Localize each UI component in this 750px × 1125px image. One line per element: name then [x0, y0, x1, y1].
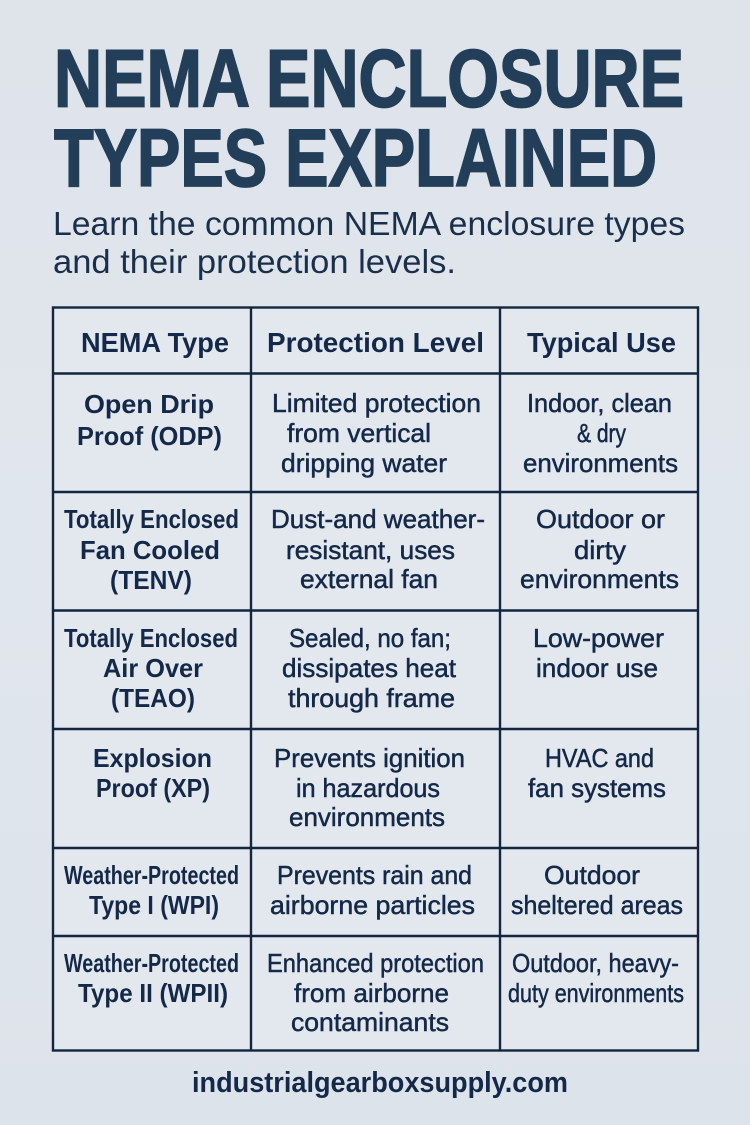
row: Open Drip Proof: environments [523, 448, 678, 478]
header row: Typical Use [527, 327, 676, 358]
row: Explosion Proof: HVAC and [545, 743, 654, 773]
footer website: industrialgearboxsupply.com [192, 1067, 568, 1099]
row: Open Drip Proof: Open Drip [84, 389, 214, 419]
header row: NEMA Type [81, 327, 229, 358]
row: Totally Enclosed Fan Cooled: Totally Enclosed [64, 504, 239, 534]
row: Totally Enclosed Fan Cooled: Fan Cooled [80, 535, 220, 565]
subtitle: and their protection levels. [53, 243, 456, 280]
row: Totally Enclosed Fan Cooled [64, 504, 679, 595]
row: Explosion Proof: environments [289, 802, 445, 832]
row: Weather-Protected Type I: Prevents rain and [277, 860, 472, 890]
row: Explosion Proof: Prevents ignition [274, 743, 465, 773]
row: Open Drip Proof: dripping water [281, 448, 447, 478]
row: Weather-Protected Type II: Enhanced protection [267, 948, 484, 978]
row: Weather-Protected Type II: duty environments [508, 978, 684, 1008]
subtitle: Learn the common NEMA enclosure types [53, 205, 685, 242]
table [53, 307, 698, 1050]
row: Totally Enclosed Fan Cooled: dirty [574, 535, 626, 565]
row: Weather-Protected Type II: Type II (WPII) [78, 978, 228, 1008]
row: Explosion Proof: Explosion [93, 743, 212, 773]
row: Totally Enclosed Air Over [64, 623, 664, 713]
row: Open Drip Proof: & dry [577, 418, 626, 448]
row: Totally Enclosed Air Over: indoor use [536, 653, 658, 683]
row: Totally Enclosed Air Over: through frame [288, 683, 455, 713]
row: Totally Enclosed Air Over: Sealed, no fan; [289, 623, 451, 653]
row: Totally Enclosed Fan Cooled: (TENV) [110, 565, 192, 595]
row: Explosion Proof: in hazardous [296, 773, 440, 803]
row: Weather-Protected Type I: airborne particles [270, 890, 475, 920]
row: Weather-Protected Type II: from airborne [294, 978, 449, 1008]
row: Open Drip Proof: from vertical [287, 418, 431, 448]
row: Totally Enclosed Fan Cooled: Dust-and weather- [271, 504, 485, 534]
row: Open Drip Proof: Limited protection [272, 388, 481, 418]
row: Open Drip Proof: Proof (ODP) [77, 421, 222, 451]
row: Weather-Protected Type II: Outdoor, heavy- [512, 948, 679, 978]
title [54, 34, 684, 204]
row: Open Drip Proof: Indoor, clean [527, 388, 672, 418]
row: Explosion Proof: fan systems [528, 773, 666, 803]
row: Totally Enclosed Fan Cooled: external fan [300, 564, 438, 594]
row: Weather-Protected Type I: Outdoor [544, 860, 640, 890]
row: Totally Enclosed Air Over: (TEAO) [111, 683, 195, 713]
row: Totally Enclosed Fan Cooled: Outdoor or [536, 504, 665, 534]
row: Weather-Protected Type II: Weather-Protected [64, 948, 239, 978]
row: Totally Enclosed Fan Cooled: resistant, uses [286, 535, 455, 565]
row: Totally Enclosed Fan Cooled: environments [520, 564, 679, 594]
row: Totally Enclosed Air Over: Low-power [533, 623, 664, 653]
row: Weather-Protected Type I: Type I (WPI) [89, 890, 219, 920]
row: Open Drip Proof [77, 388, 678, 478]
header row [81, 327, 676, 358]
row: Explosion Proof [93, 743, 666, 832]
row: Weather-Protected Type I: sheltered areas [511, 890, 683, 920]
row: Totally Enclosed Air Over: Totally Enclosed [64, 623, 238, 653]
row: Weather-Protected Type I [64, 860, 683, 920]
row: Explosion Proof: Proof (XP) [96, 773, 210, 803]
row: Weather-Protected Type II: contaminants [291, 1007, 449, 1037]
header row: Protection Level [267, 327, 484, 358]
row: Totally Enclosed Air Over: dissipates heat [282, 653, 457, 683]
subtitle [53, 205, 685, 280]
row: Totally Enclosed Air Over: Air Over [103, 653, 203, 683]
row: Weather-Protected Type II [64, 948, 684, 1037]
row: Weather-Protected Type I: Weather-Protected [64, 860, 239, 890]
